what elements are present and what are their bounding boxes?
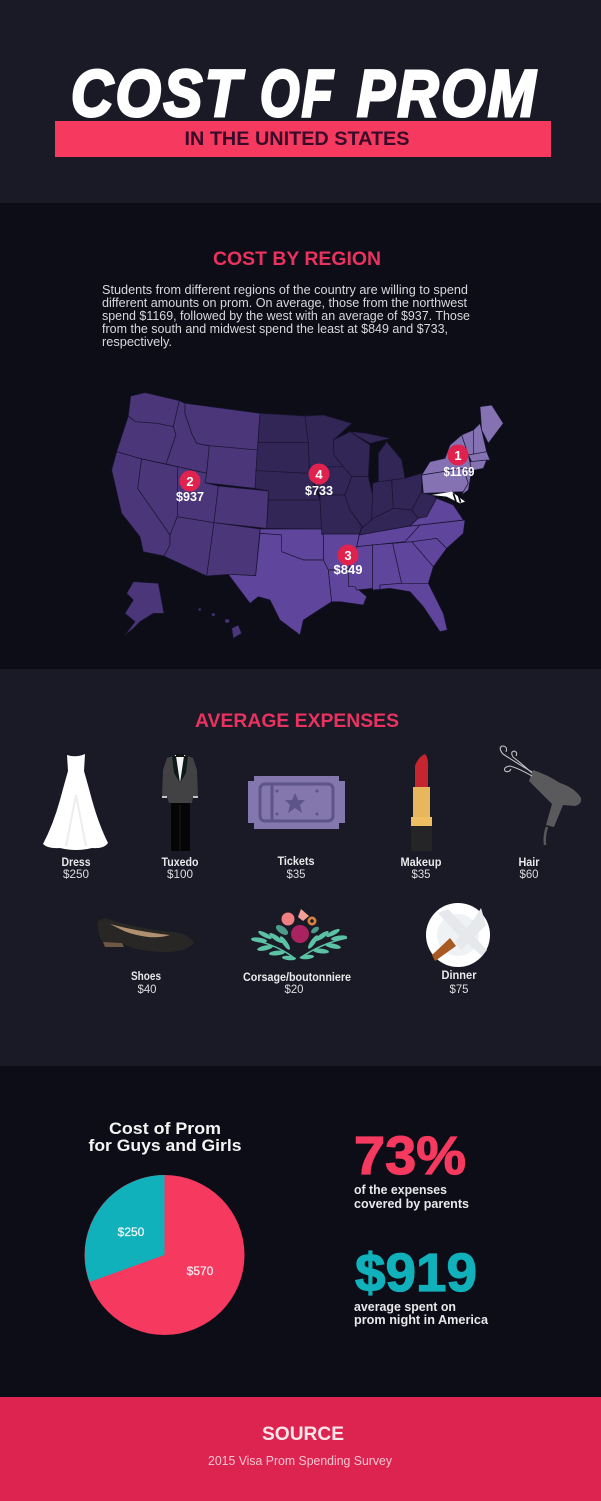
pie chart [84, 1175, 244, 1335]
subtitle banner: IN THE UNITED STATES [184, 128, 410, 150]
title: COST [71, 56, 244, 130]
icon: lipstick [411, 754, 432, 851]
stat: 73%: covered by parents [354, 1196, 469, 1211]
marker 2: west: 2 [186, 474, 194, 489]
title [71, 56, 538, 130]
icon: tuxedo [162, 754, 198, 851]
value: corsage/boutonniere: $20 [284, 982, 304, 996]
marker 4: midwest: 4 [315, 467, 323, 482]
panel: source footer [0, 1397, 601, 1501]
chart title: for Guys and Girls [88, 1137, 242, 1155]
icon: shoe [98, 918, 194, 952]
midwest region states [255, 413, 437, 535]
value: tuxedo: $100 [167, 867, 193, 881]
icon: dinner plate [426, 903, 490, 967]
marker 1: northeast: 1 [454, 448, 462, 463]
source text: 2015 Visa Prom Spending Survey [208, 1453, 392, 1468]
source heading: SOURCE [262, 1424, 344, 1445]
value: shoes: $40 [138, 982, 157, 996]
region description text: Students from different regions of the country are willing to spend [102, 283, 468, 297]
icon: dress [43, 754, 108, 850]
marker 1: northeast [444, 444, 475, 479]
icon: corsage [251, 909, 347, 961]
value: makeup: $35 [412, 867, 431, 881]
header panel [55, 56, 551, 157]
icon: tickets [248, 776, 345, 829]
stat: 73%: of the expenses [354, 1182, 447, 1197]
heading: cost by region: COST BY REGION [213, 248, 381, 270]
stat: $919: $919 [355, 1243, 477, 1303]
map of the United States [112, 393, 503, 638]
value: tickets: $35 [286, 867, 306, 881]
label: dress: Dress [62, 855, 91, 869]
label: shoes: Shoes [131, 969, 161, 983]
marker 3: south: $849 [334, 563, 363, 577]
label: hair: Hair [518, 855, 540, 869]
west region states [112, 393, 268, 638]
title: OF [260, 56, 335, 130]
value: dress: $250 [63, 867, 89, 881]
chart title [88, 1120, 242, 1155]
south region states [228, 498, 465, 635]
region description text: respectively. [102, 335, 172, 349]
panel: cost by region [102, 248, 503, 638]
panel: stats [84, 1120, 489, 1335]
Maryland highlighted area [432, 492, 465, 503]
label: corsage/boutonniere: Corsage/boutonniere [243, 970, 351, 984]
marker 2: west: $937 [176, 490, 204, 504]
label: makeup: Makeup [400, 855, 442, 869]
marker 2: west [176, 470, 204, 504]
marker 3: south [334, 544, 363, 577]
stat: $919: prom night in America [354, 1312, 489, 1327]
region description text: different amounts on prom. On average, those from the northwest [102, 296, 467, 310]
chart title: Cost of Prom [109, 1120, 221, 1138]
pie chart: $570 [187, 1264, 214, 1278]
label: dinner: Dinner [442, 968, 477, 982]
value: hair: $60 [520, 867, 539, 881]
title: PROM [357, 56, 538, 130]
region description text: from the south and midwest spend the least at $849 and $733, [102, 322, 448, 336]
marker 4: midwest [305, 464, 333, 498]
label: tuxedo: Tuxedo [162, 855, 198, 869]
subtitle banner [55, 121, 551, 157]
value: dinner: $75 [450, 982, 469, 996]
label: tickets: Tickets [278, 854, 315, 868]
stat: $919 [354, 1243, 489, 1327]
marker 3: south: 3 [344, 548, 352, 563]
stat: 73% [354, 1126, 469, 1211]
pie chart: $250 [118, 1225, 145, 1239]
heading: average expenses: AVERAGE EXPENSES [195, 710, 399, 732]
region description text: spend $1169, followed by the west with an average of $937. Those [102, 309, 470, 323]
region description text [102, 283, 470, 349]
icon: hair dryer [500, 746, 581, 845]
marker 1: northeast: $1169 [444, 465, 475, 479]
stat: 73%: 73% [354, 1126, 466, 1186]
northeast region states [422, 405, 503, 495]
marker 4: midwest: $733 [305, 484, 333, 498]
panel: average expenses [43, 710, 581, 996]
stat: $919: average spent on [354, 1299, 456, 1314]
